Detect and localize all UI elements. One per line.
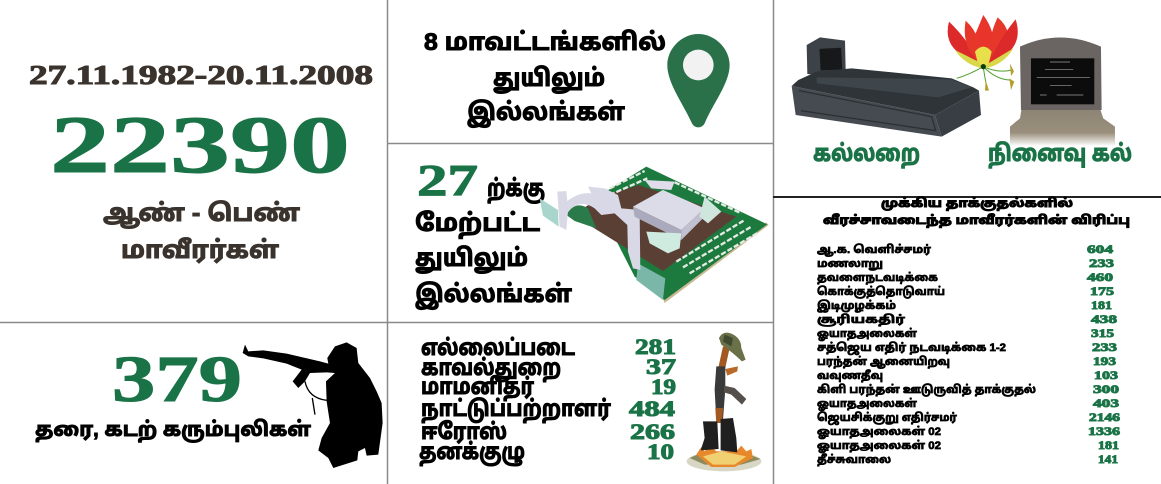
- battle counts: 103: [1094, 368, 1118, 382]
- group labels: எல்லைப்படை: [421, 335, 575, 360]
- group labels: மாமனிதர்: [421, 374, 534, 401]
- battle names: ஓயாதஅலைகள்: [817, 398, 917, 412]
- group counts: 266: [630, 419, 675, 444]
- illustration: rifle memorial with helmet and boots: [687, 333, 761, 471]
- battle counts: 193: [1093, 354, 1116, 368]
- suffix: ற்க்கு: [487, 175, 545, 204]
- battle names: ஓயாதஅலைகள் 02: [817, 440, 941, 454]
- line: homes: இல்லங்கள்: [415, 281, 572, 310]
- list title: வீரச்சாவடைந்த மாவீரர்களின் விரிப்பு: [823, 213, 1130, 228]
- panel: other fallen by group: [419, 333, 761, 471]
- panel: over 27 cemeteries: [415, 156, 769, 310]
- illustration: cemetery model: [540, 167, 769, 303]
- illustration: memorial stone: [1010, 37, 1115, 146]
- battle names: சூரியகதிர்: [817, 314, 905, 327]
- heading line 2: துயிலும்: [493, 65, 605, 94]
- total count 22390: 22390: [50, 99, 350, 190]
- battle names: ஆ.க. வெளிச்சமர்: [817, 244, 931, 258]
- battle counts: 1336: [1088, 424, 1120, 438]
- label: male and female: ஆண் - பெண்: [103, 200, 300, 229]
- panel: eight districts: [424, 29, 730, 128]
- group labels: தனக்குழு: [419, 439, 525, 466]
- count 27: 27: [417, 156, 478, 205]
- battle counts: 438: [1091, 312, 1117, 326]
- battle names: ஓயாதஅலைகள் 02: [817, 426, 941, 440]
- battle names: வவுணதீவு: [817, 369, 883, 383]
- battle counts: 233: [1092, 340, 1117, 354]
- date range heading: 27.11.1982-20.11.2008: [29, 60, 373, 90]
- list title: [823, 196, 1130, 228]
- battle names: ஜெயசிக்குறு எதிர்சமர்: [817, 412, 957, 426]
- battle counts: 233: [1089, 256, 1114, 270]
- count 379: 379: [112, 343, 242, 416]
- label: land and sea black tigers: தரை, கடற் கரும்புலிகள்: [35, 419, 311, 443]
- illustration: grave tomb: [792, 37, 981, 137]
- group counts: 37: [646, 354, 676, 379]
- battle counts: 315: [1091, 326, 1114, 340]
- battle counts: 141: [1098, 452, 1118, 466]
- icon: soldier silhouette: [243, 342, 383, 468]
- battle names: பரந்தன் ஆனையிறவு: [817, 356, 950, 370]
- battle names: கொக்குத்தொடுவாய்: [817, 285, 945, 299]
- battle counts: 300: [1093, 382, 1119, 396]
- battle counts: 175: [1090, 284, 1114, 298]
- heading line 1: 8 மாவட்டங்களில்: [424, 29, 666, 56]
- battle counts: 403: [1093, 396, 1119, 410]
- battle counts: 2146: [1089, 410, 1120, 424]
- battle names: சத்ஜெய எதிர் நடவடிக்கை 1-2: [817, 342, 1006, 356]
- icon: gloriosa flower: [948, 15, 1018, 91]
- group counts: 19: [651, 374, 676, 399]
- battle names: [817, 244, 1036, 467]
- panel: grave and memorial stone: [792, 15, 1132, 169]
- battle counts: [1087, 242, 1120, 466]
- battle names: மணலாறு: [817, 258, 883, 271]
- list title: முக்கிய தாக்குதல்களில்: [881, 196, 1073, 211]
- battle counts: 460: [1087, 270, 1113, 284]
- panel: black tigers: [35, 342, 383, 468]
- heading line 3: இல்லங்கள்: [467, 99, 625, 128]
- panel: total fallen: [29, 60, 373, 264]
- battle names: தீச்சுவாலை: [817, 453, 891, 467]
- battle counts: 181: [1098, 438, 1119, 452]
- group counts: [629, 334, 676, 464]
- line: more than: மேற்பட்ட: [415, 210, 540, 239]
- group labels: ஈரோஸ்: [421, 419, 507, 444]
- group labels: [419, 335, 611, 466]
- label: grave: கல்லறை: [813, 140, 920, 169]
- battle counts: 604: [1087, 242, 1113, 256]
- group labels: நாட்டுப்பற்றாளர்: [421, 396, 611, 423]
- battle names: தவளைநடவடிக்கை: [817, 272, 938, 285]
- battle counts: 181: [1091, 298, 1112, 312]
- icon: map pin: [667, 34, 730, 127]
- group counts: 484: [629, 396, 675, 421]
- battle names: இடிமுழக்கம்: [817, 300, 896, 313]
- panel: major battles list: [817, 196, 1130, 467]
- battle names: கிளி பரந்தன் ஊடுருவித் தாக்குதல்: [817, 383, 1036, 397]
- label: heroes: மாவீரர்கள்: [121, 237, 279, 264]
- battle names: ஓயாதஅலைகள்: [817, 328, 917, 342]
- line: sleeping: துயிலும்: [415, 245, 528, 274]
- group counts: 281: [635, 334, 676, 359]
- group counts: 10: [647, 439, 674, 464]
- group labels: காவல்துறை: [421, 355, 561, 382]
- label: memorial stone: நினைவு கல்: [988, 140, 1132, 169]
